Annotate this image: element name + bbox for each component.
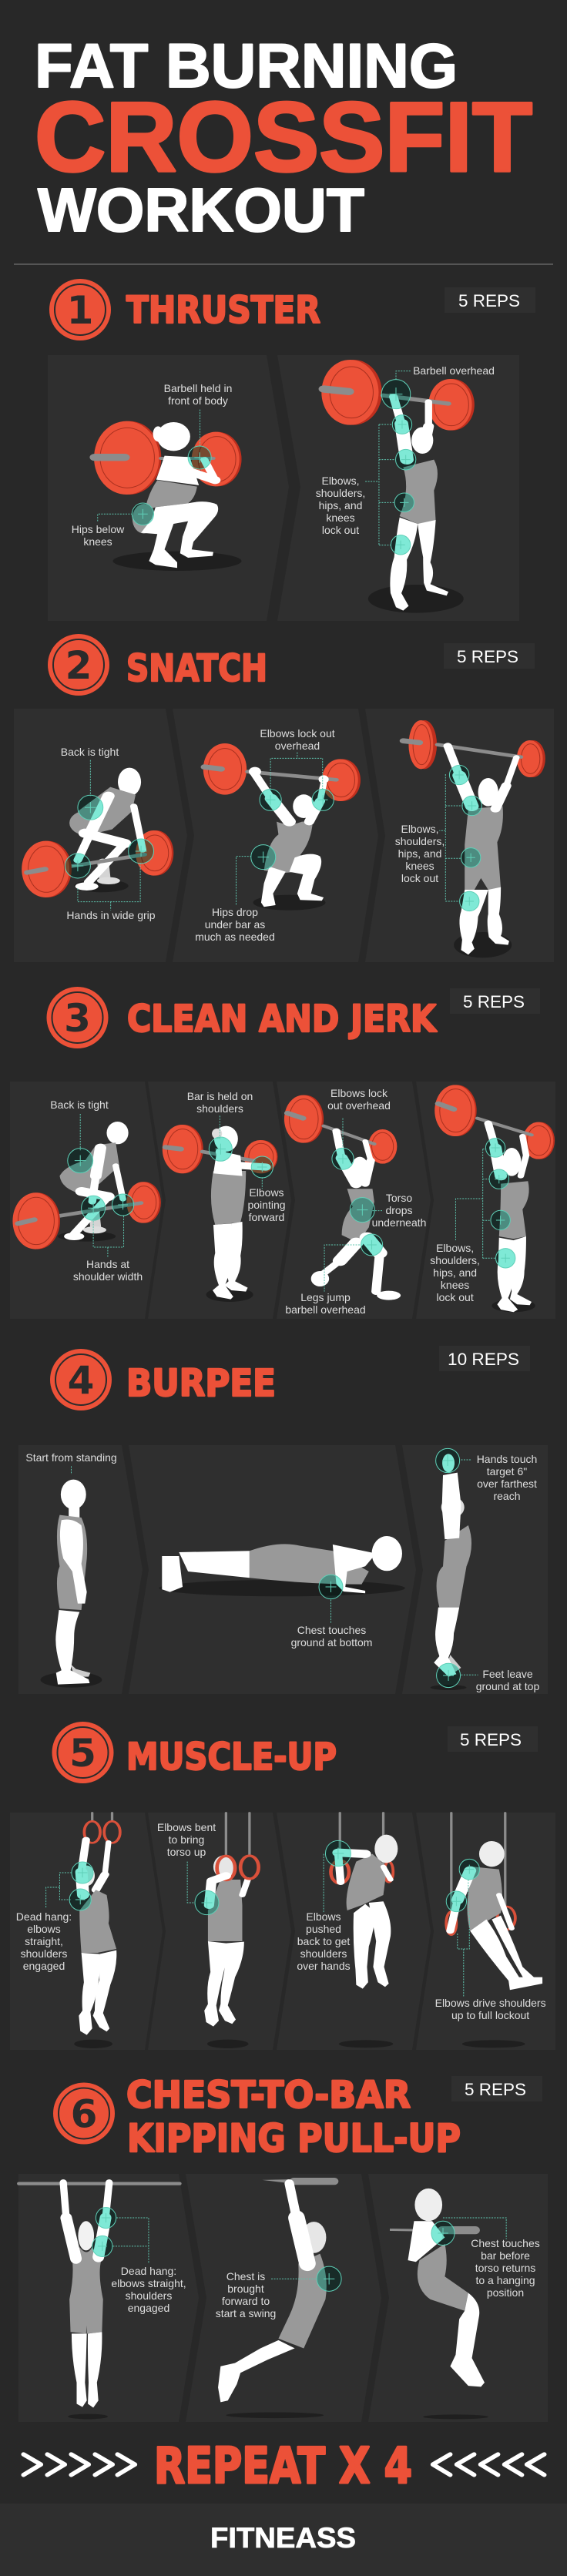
label: start from standing: Start from standing — [25, 1451, 117, 1464]
panel: muscle-up steps — [10, 1813, 555, 2050]
number badge 2 — [48, 634, 109, 696]
label: elbows shoulders hips knees lock out: knees — [405, 860, 434, 872]
label: elbows lock out overhead: overhead — [275, 740, 320, 752]
heading: clean and jerk: CLEAN AND JERK — [127, 998, 438, 1041]
label: elbows shoulders hips knees lock out: Elbows, — [436, 1242, 474, 1254]
label: back is tight: Back is tight — [50, 1098, 109, 1111]
label: bar is held on shoulders: shoulders — [196, 1102, 243, 1115]
reps badge: 5 REPS — [460, 1730, 522, 1749]
label: elbows lock out overhead: Elbows lock — [330, 1087, 388, 1099]
title — [35, 32, 532, 244]
figure: front rack — [163, 1115, 277, 1302]
reps badge: 5 REPS — [457, 647, 518, 666]
label: dead hang: Dead hang: — [16, 1910, 72, 1923]
label: elbows pushed back: over hands — [297, 1960, 351, 1972]
label: elbows shoulders hips knees lock out: lock out — [436, 1291, 474, 1303]
title: CROSSFIT — [35, 82, 532, 193]
label: barbell held in front of body: front of body — [168, 394, 228, 407]
label: chest is brought forward: start a swing — [216, 2307, 276, 2319]
label: hands touch target: over farthest — [477, 1478, 537, 1490]
figure: jerk lockout — [434, 1085, 555, 1312]
label: chest is brought forward: brought — [227, 2283, 264, 2295]
label: elbows shoulders hips knees lock out: shoulders, — [395, 835, 445, 847]
label: elbows drive shoulders: Elbows drive shoulders — [435, 1997, 546, 2009]
reps badge: 5 REPS — [458, 291, 520, 310]
heading: muscle-up: MUSCLE-UP — [126, 1736, 337, 1779]
section 5: muscle-up — [10, 1722, 555, 2050]
section 1: thruster — [48, 279, 535, 621]
title: FAT BURNING — [35, 32, 458, 101]
figure: elbows bent on rings — [187, 1813, 259, 2048]
footer: FITNEASS — [210, 2522, 356, 2554]
label: torso drops underneath: Torso — [386, 1192, 412, 1204]
number badge 2: 2 — [65, 643, 92, 688]
label: elbows shoulders hips knees lock out: Elbows, — [321, 475, 360, 487]
number badge 3 — [46, 987, 108, 1048]
label: barbell held in front of body: Barbell held in — [164, 382, 232, 394]
number badge 6: 6 — [71, 2092, 97, 2137]
number badge 3: 3 — [64, 996, 91, 1041]
label: elbows shoulders hips knees lock out: hips, and — [398, 847, 441, 860]
section 2: snatch — [14, 634, 554, 962]
label: elbows shoulders hips knees lock out: hips, and — [319, 499, 362, 512]
label: elbows shoulders hips knees lock out: knees — [326, 512, 355, 524]
panel: burpee steps — [18, 1445, 548, 1694]
label: dead hang: Dead hang: — [121, 2265, 176, 2277]
label: chest is brought forward: forward to — [222, 2295, 270, 2307]
label: dead hang: engaged — [23, 1960, 65, 1972]
figure: elbows pushed back — [324, 1813, 398, 2048]
figure: jerk lunge — [284, 1095, 401, 1300]
label: elbows shoulders hips knees lock out: knees — [441, 1279, 469, 1291]
label: elbows pointing forward: Elbows — [249, 1186, 284, 1199]
number badge 5: 5 — [69, 1731, 96, 1776]
label: chest touches bar: to a hanging — [475, 2274, 535, 2286]
number badge 1 — [49, 279, 111, 340]
reps badge: 5 REPS — [465, 2080, 526, 2099]
section 3: clean and jerk — [10, 987, 555, 1319]
label: elbows bent: torso up — [167, 1846, 206, 1858]
footer — [0, 2504, 567, 2576]
label: hands touch target: reach — [493, 1490, 521, 1502]
label: hands touch target: target 6" — [487, 1465, 527, 1478]
label: elbows pushed back: shoulders — [300, 1947, 347, 1960]
number badge 1: 1 — [67, 288, 93, 333]
figure: deadlift setup — [12, 1114, 161, 1257]
label: chest touches bar: bar before — [481, 2249, 530, 2262]
label: dead hang: engaged — [128, 2302, 169, 2314]
label: feet leave ground at top: Feet leave — [482, 1668, 533, 1680]
label: elbows shoulders hips knees lock out: Elbows, — [401, 823, 439, 835]
figure: snatch lockout — [403, 720, 545, 958]
label: elbows pushed back: pushed — [306, 1923, 341, 1935]
reps badge: 10 REPS — [448, 1350, 519, 1369]
label: elbows shoulders hips knees lock out: shoulders, — [316, 487, 365, 499]
label: elbows drive shoulders: up to full lockout — [451, 2009, 529, 2021]
figure: barbell overhead — [321, 360, 475, 613]
label: barbell overhead: Barbell overhead — [413, 364, 495, 377]
label: torso drops underneath: drops — [385, 1204, 413, 1216]
label: chest touches bar: torso returns — [475, 2262, 535, 2274]
label: hands in wide grip: Hands in wide grip — [66, 909, 156, 921]
label: dead hang: shoulders — [21, 1947, 67, 1960]
heading: chest-to-bar kipping pull-up: CHEST-TO-BAR — [126, 2074, 411, 2117]
label: elbows lock out overhead: out overhead — [327, 1099, 391, 1112]
label: chest touches ground at bottom: Chest touches — [297, 1624, 366, 1636]
label: elbows shoulders hips knees lock out: hips, and — [433, 1266, 477, 1279]
label: legs jump barbell overhead: Legs jump — [300, 1291, 351, 1303]
title: WORKOUT — [38, 176, 364, 244]
label: dead hang: elbows straight, — [111, 2277, 186, 2289]
label: elbows shoulders hips knees lock out: lock out — [322, 524, 359, 536]
reps badge: 5 REPS — [463, 992, 525, 1011]
label: hips drop under bar: much as needed — [195, 931, 275, 943]
panel: thruster steps — [48, 355, 519, 621]
figure: swing forward — [218, 2179, 341, 2418]
label: bar is held on shoulders: Bar is held on — [187, 1090, 253, 1102]
figure: standing — [41, 1466, 102, 1688]
reps badge — [448, 1726, 538, 1752]
label: hands touch target: Hands touch — [477, 1453, 537, 1465]
reps badge — [451, 2076, 542, 2101]
figure: front squat with barbell — [94, 410, 242, 571]
reps badge — [439, 1346, 530, 1371]
label: chest touches bar: position — [487, 2286, 524, 2299]
label: elbows bent: Elbows bent — [157, 1821, 216, 1833]
label: dead hang: shoulders — [126, 2289, 172, 2302]
heading: chest-to-bar kipping pull-up — [126, 2074, 461, 2161]
figure: full lockout — [446, 1813, 542, 2048]
figure: jump reach — [431, 1448, 478, 1690]
panel: snatch steps — [14, 709, 554, 962]
label: feet leave ground at top: ground at top — [476, 1680, 539, 1692]
label: elbows pushed back: Elbows — [306, 1910, 341, 1923]
reps badge — [444, 643, 535, 669]
section 4: burpee — [18, 1346, 548, 1694]
arrows: left pointing — [433, 2454, 544, 2475]
figure: dead hang on rings — [46, 1813, 120, 2048]
label: elbows pointing forward: forward — [249, 1211, 284, 1223]
label: hips below knees: knees — [83, 535, 112, 548]
figure: dead hang on bar — [18, 2182, 179, 2419]
label: chest touches ground at bottom: ground at bottom — [291, 1636, 372, 1649]
label: elbows pushed back: back to get — [297, 1935, 350, 1947]
heading: burpee: BURPEE — [126, 1362, 276, 1405]
reps badge — [450, 988, 540, 1014]
label: elbows bent: to bring — [169, 1833, 204, 1846]
number badge 4: 4 — [68, 1358, 94, 1403]
label: elbows shoulders hips knees lock out: shoulders, — [430, 1254, 480, 1266]
label: back is tight: Back is tight — [61, 746, 119, 758]
number badge 6 — [53, 2083, 115, 2145]
figure: push-up — [159, 1536, 405, 1623]
reps badge — [445, 287, 535, 313]
label: chest touches bar: Chest touches — [471, 2237, 540, 2249]
label: elbows lock out overhead: Elbows lock out — [260, 727, 335, 740]
repeat x 4: REPEAT X 4 — [154, 2438, 412, 2495]
label: chest is brought forward: Chest is — [226, 2270, 265, 2283]
heading: snatch: SNATCH — [126, 647, 267, 690]
panel: pull-up steps — [18, 2174, 548, 2422]
label: hips drop under bar: under bar as — [205, 918, 265, 931]
section 6: chest-to-bar kipping pull-up — [18, 2074, 548, 2422]
label: hips below knees: Hips below — [72, 523, 125, 535]
label: dead hang: straight, — [25, 1935, 63, 1947]
label: elbows shoulders hips knees lock out: lock out — [401, 872, 438, 884]
number badge 5 — [52, 1722, 114, 1783]
label: legs jump barbell overhead: barbell overhead — [285, 1303, 366, 1316]
arrows: right pointing — [24, 2454, 135, 2475]
label: torso drops underneath: underneath — [372, 1216, 426, 1229]
label: elbows pointing forward: pointing — [247, 1199, 286, 1211]
heading: thruster: THRUSTER — [126, 289, 320, 332]
heading: chest-to-bar kipping pull-up: KIPPING PULL-UP — [127, 2116, 461, 2161]
label: hands at shoulder width: Hands at — [86, 1258, 129, 1270]
label: hands at shoulder width: shoulder width — [73, 1270, 143, 1283]
figure: overhead squat — [203, 743, 361, 911]
label: hips drop under bar: Hips drop — [212, 906, 258, 918]
label: dead hang: elbows — [27, 1923, 61, 1935]
figure: chest to bar — [390, 2189, 506, 2419]
figure: snatch setup — [22, 760, 173, 911]
panel: clean and jerk steps — [10, 1082, 555, 1319]
number badge 4 — [50, 1349, 112, 1410]
